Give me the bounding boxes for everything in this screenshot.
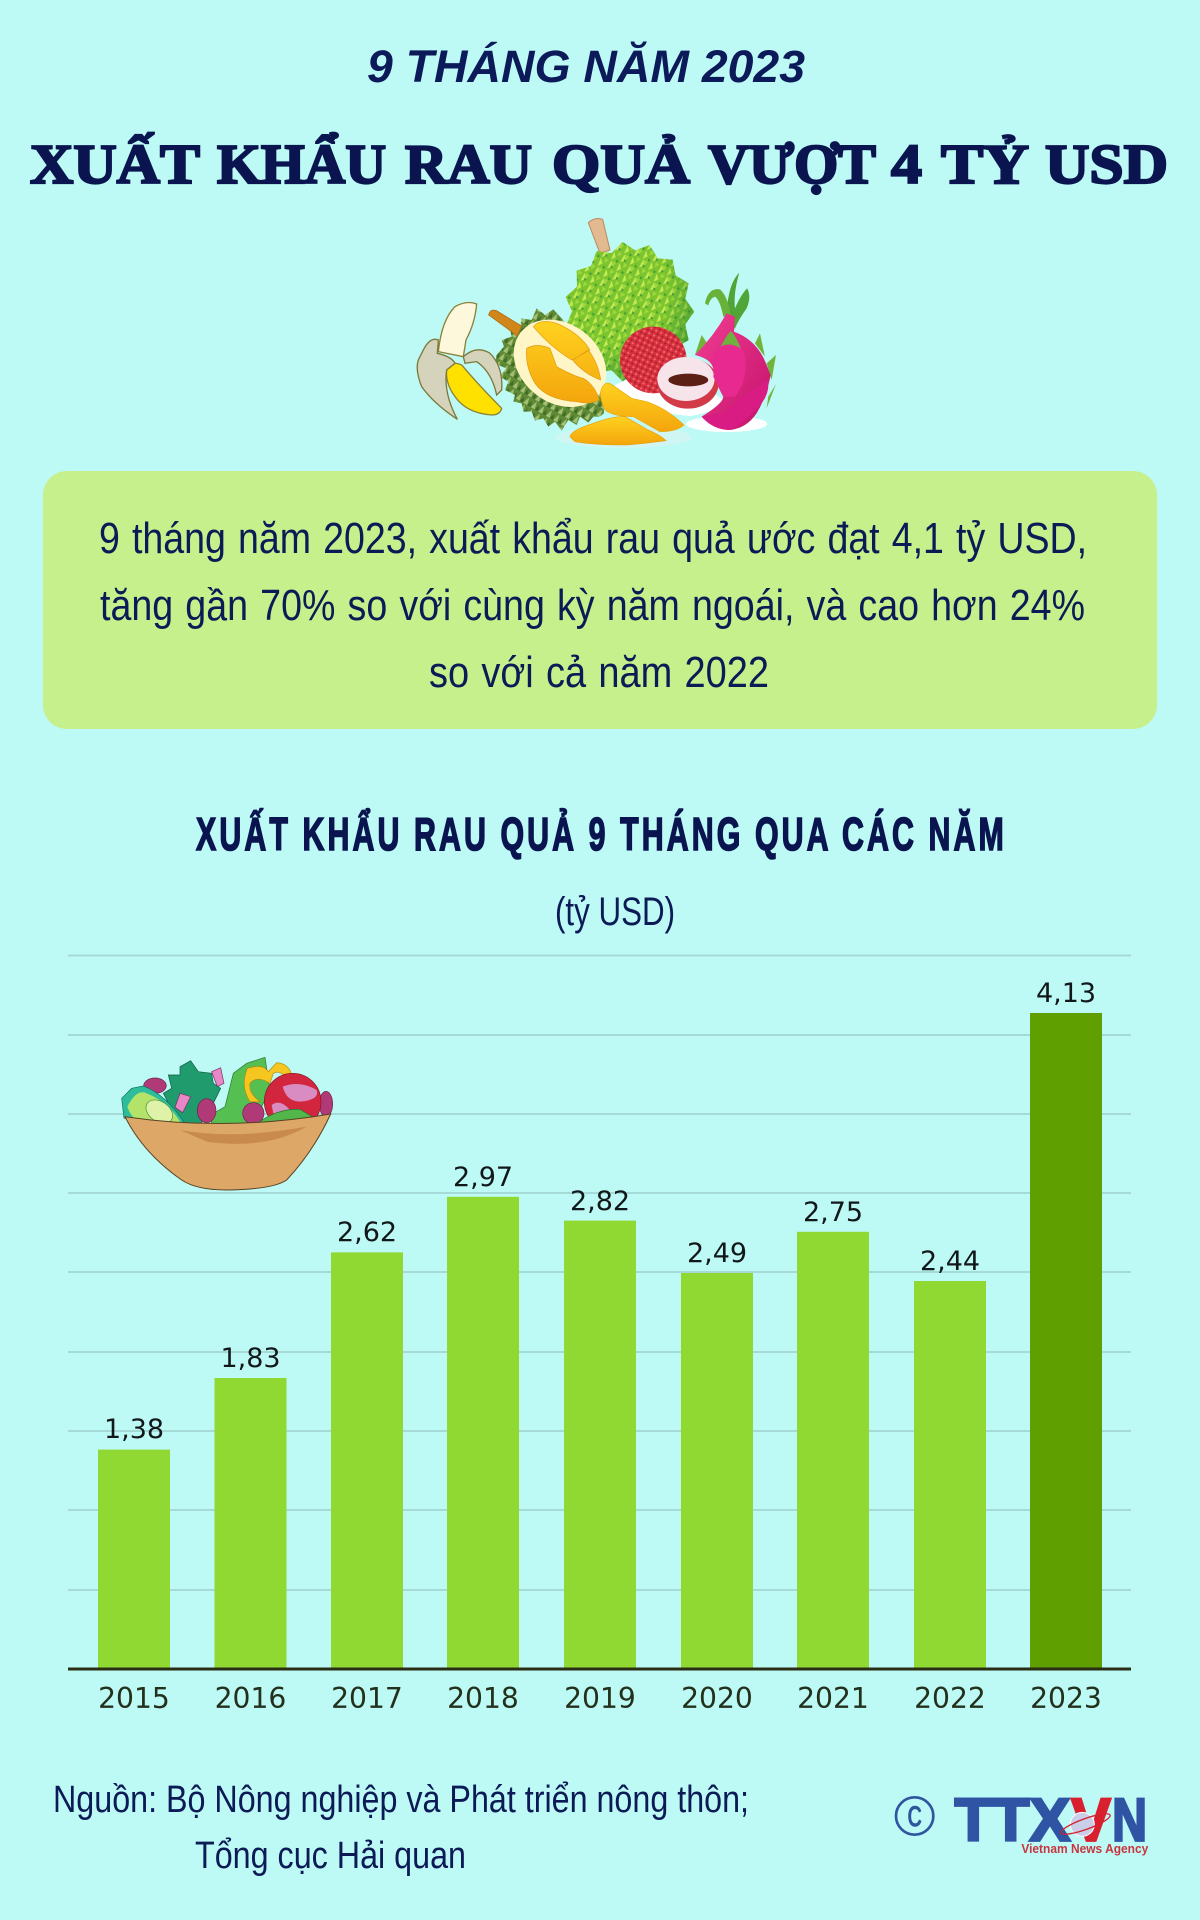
bar 2017: 2,62 [337, 1217, 397, 1248]
icon: tropical fruits [417, 219, 776, 448]
summary text: so với cả năm 2022 [429, 648, 769, 697]
whole green durian [566, 242, 694, 381]
dragon fruit body [695, 313, 771, 430]
white plate [615, 377, 723, 416]
logo: TTXVN [896, 1785, 1149, 1856]
shadow plate [686, 416, 767, 432]
title: USD [1045, 134, 1168, 196]
source note [53, 1779, 749, 1877]
berries [144, 1078, 333, 1124]
summary text [99, 514, 1087, 697]
logo letters: N [1112, 1785, 1147, 1853]
lettuce right [211, 1057, 270, 1124]
title: TỶ [941, 134, 1029, 196]
bowl body [125, 1114, 331, 1190]
durian flesh pieces [526, 321, 601, 403]
bar 2016 [214, 1343, 286, 1715]
flesh piece front [570, 417, 666, 445]
logo letters [955, 1785, 1147, 1853]
dragon fruit scale tip [721, 331, 741, 348]
bar 2015 [98, 1414, 170, 1715]
logo tagline: Vietnam News Agency [1021, 1841, 1149, 1856]
bar 2019: 2,82 [570, 1186, 630, 1217]
dragon fruit top [723, 273, 749, 333]
bar 2021: 2021 [797, 1682, 869, 1715]
logo globe [1070, 1812, 1094, 1836]
logo orbit [1059, 1810, 1112, 1838]
bar 2017: 2017 [331, 1682, 403, 1715]
logo letters: V [1071, 1785, 1111, 1853]
title: QUẢ [552, 134, 691, 196]
durian stem [588, 219, 610, 253]
title [30, 132, 1168, 196]
bowl shading [180, 1127, 307, 1144]
ground shadow [555, 427, 692, 448]
pink pieces [175, 1068, 224, 1113]
chart unit: (tỷ USD) [555, 890, 675, 934]
chart heading: XUẤT KHẨU RAU QUẢ 9 THÁNG QUA CÁC NĂM [196, 808, 1004, 861]
copyright symbol [896, 1797, 933, 1835]
durian cut stem [489, 310, 522, 336]
bar 2021 [797, 1197, 869, 1715]
icon: salad bowl [122, 1057, 333, 1190]
bar 2023: 2023 [1030, 1682, 1102, 1715]
dragon fruit curl [705, 289, 731, 317]
bar 2020 [681, 1238, 753, 1715]
cucumber flesh [127, 1092, 182, 1124]
bar 2016: 2016 [215, 1682, 286, 1715]
dragon fruit scale [713, 332, 746, 397]
title: RAU [405, 134, 532, 196]
bar 2023: 4,13 [1036, 978, 1096, 1009]
source note: Tổng cục Hải quan [195, 1835, 466, 1877]
dragon fruit leaves [695, 333, 776, 408]
panel: summary [43, 471, 1157, 729]
green leaf [257, 1109, 317, 1124]
cucumber [122, 1086, 185, 1124]
tomato pulp [272, 1084, 317, 1113]
bar 2022: 2022 [914, 1682, 986, 1715]
bar 2022 [914, 1246, 986, 1715]
flesh pile [601, 383, 684, 432]
banana [438, 302, 477, 357]
title: VƯỢT [708, 134, 876, 196]
tomato [264, 1073, 321, 1130]
bar 2018 [447, 1162, 519, 1715]
title: KHẨU [217, 132, 386, 196]
title: 4 [891, 134, 922, 196]
durian cream interior [496, 302, 624, 425]
bar 2015: 1,38 [104, 1414, 164, 1445]
bar 2023 [1030, 978, 1102, 1715]
bar 2020: 2,49 [687, 1238, 747, 1269]
bar 2019: 2019 [564, 1682, 636, 1715]
yellow pepper [244, 1063, 293, 1102]
bar 2016: 1,83 [220, 1343, 281, 1374]
lychee seed [668, 374, 708, 386]
lettuce left [163, 1061, 221, 1125]
bar 2017 [331, 1217, 403, 1715]
bar 2018: 2018 [447, 1682, 519, 1715]
title: XUẤT [30, 132, 200, 196]
bar 2015: 2015 [98, 1682, 170, 1715]
copyright symbol: C [907, 1801, 922, 1834]
logo letters: TTX [955, 1785, 1070, 1853]
bar 2018: 2,97 [453, 1162, 513, 1193]
open durian shell [495, 308, 604, 431]
lychee white flesh [657, 357, 715, 401]
bar 2021: 2,75 [803, 1197, 863, 1228]
subtitle: 9 THÁNG NĂM 2023 [367, 41, 805, 92]
chart axis [68, 1668, 1131, 1670]
lychee whole [620, 327, 687, 393]
bar 2020: 2020 [681, 1682, 753, 1715]
cucumber core [142, 1095, 177, 1128]
bar 2019 [564, 1186, 636, 1715]
dragon fruit lower lobe [702, 380, 768, 430]
source note: Nguồn: Bộ Nông nghiệp và Phát triển nông thôn; [53, 1779, 749, 1821]
lychee half [657, 358, 719, 409]
bar chart [98, 978, 1102, 1715]
bar 2022: 2,44 [920, 1246, 980, 1277]
